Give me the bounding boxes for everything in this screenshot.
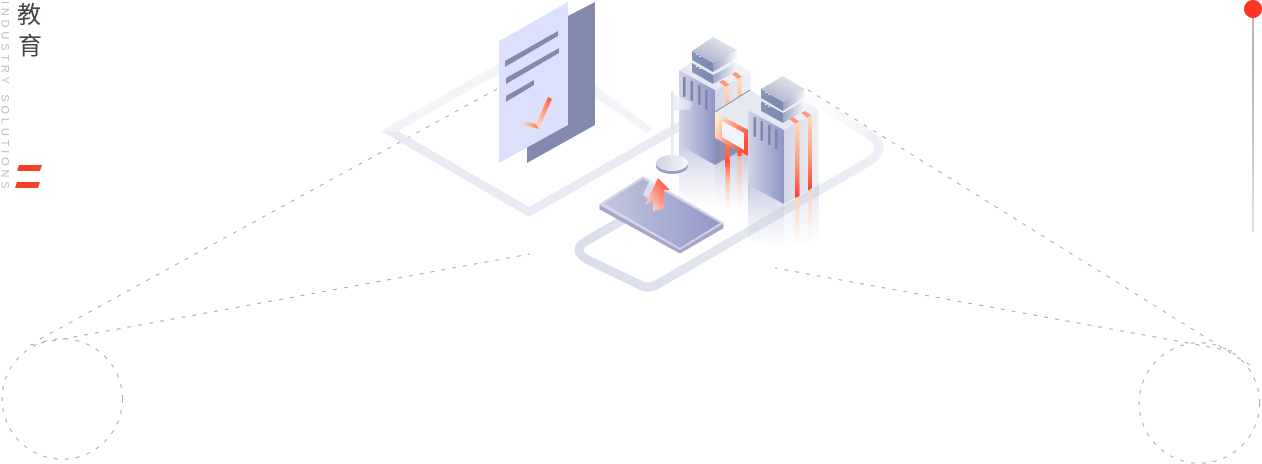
heading: education: 教 <box>17 2 41 29</box>
dashed circle right <box>1139 343 1260 463</box>
building: right tower <box>748 90 819 250</box>
heading: education: 育 <box>18 33 42 60</box>
server stack: right <box>761 76 805 123</box>
icon: up arrow <box>645 178 670 211</box>
heading: education <box>17 2 42 60</box>
server stack: left <box>692 37 737 84</box>
dashed circle left <box>2 339 122 459</box>
middle connector block <box>715 90 783 156</box>
icon: check mark <box>520 97 552 129</box>
flag <box>656 91 692 174</box>
document icon <box>499 2 595 163</box>
dashed connector lines <box>30 88 1250 365</box>
platform outline: rounded <box>579 92 879 287</box>
icon: red slashes <box>15 165 42 188</box>
building: left tower <box>679 50 751 210</box>
platform outline: document <box>381 60 682 217</box>
icon: ghost arrow <box>643 173 664 200</box>
pin marker <box>1244 0 1262 232</box>
tablet <box>600 173 723 253</box>
